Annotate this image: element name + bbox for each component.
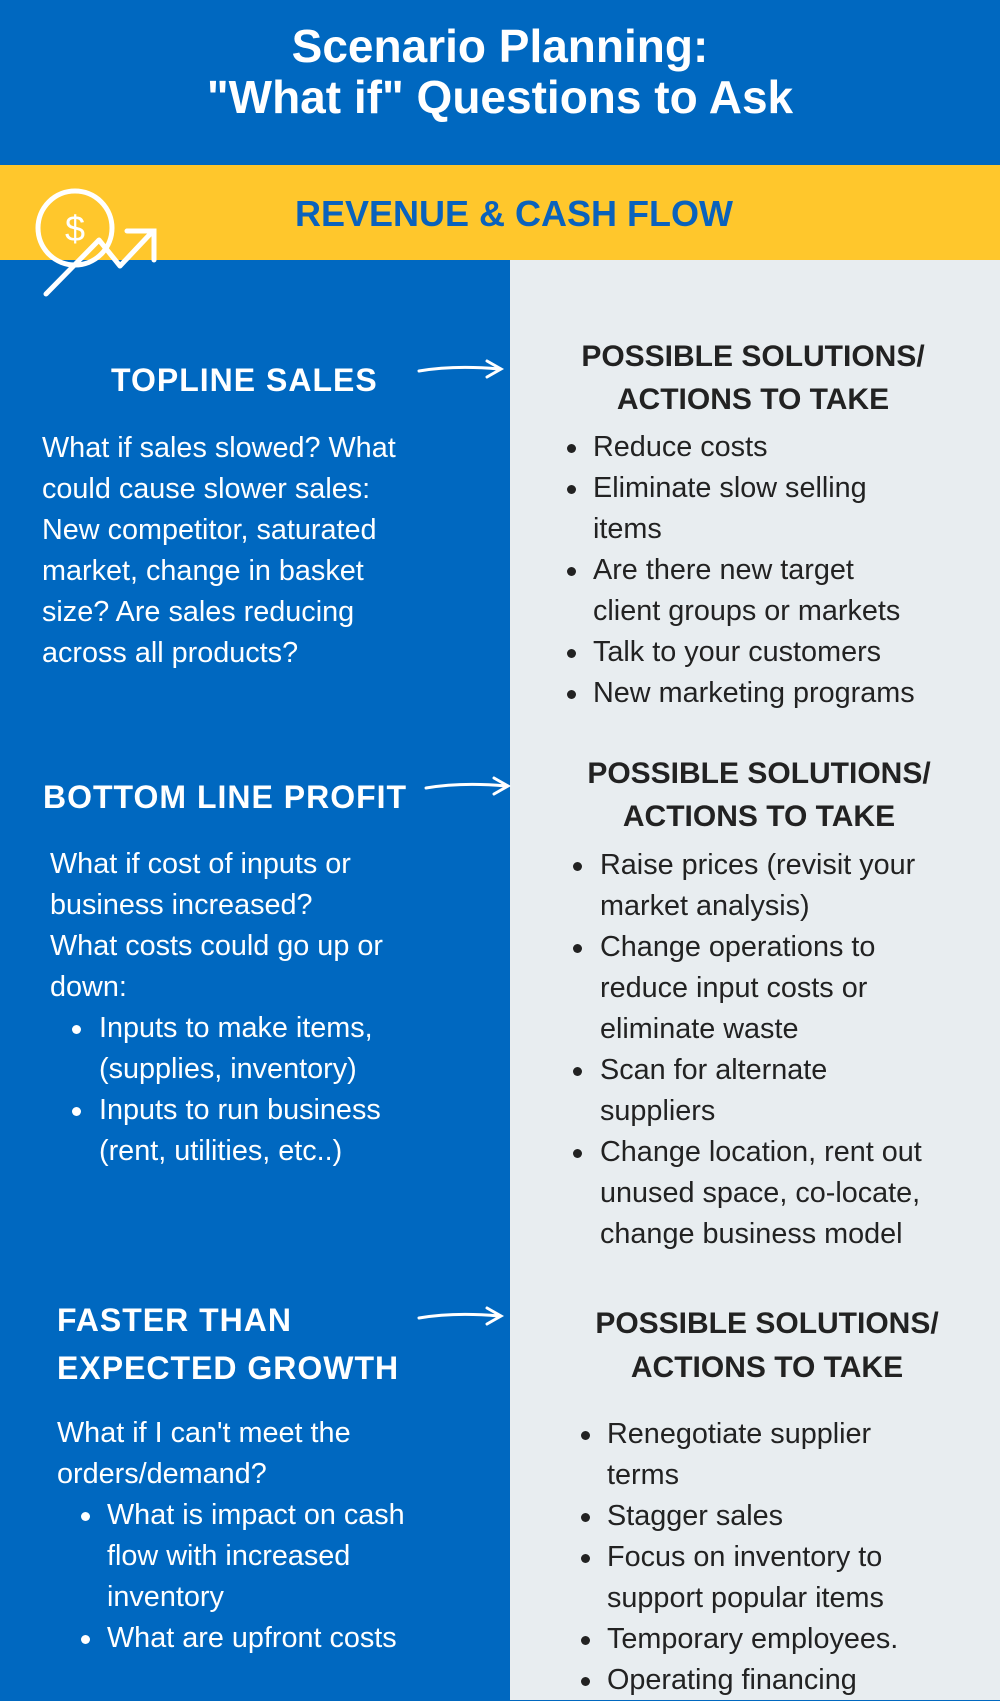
- bullet list: support popular items: [607, 1582, 884, 1614]
- body text: business increased?: [50, 889, 313, 921]
- bullet list: Are there new target: [593, 554, 854, 586]
- bullet list: unused space, co-locate,: [600, 1177, 920, 1209]
- heading: faster than expected growth: EXPECTED GROWTH: [57, 1350, 399, 1386]
- body text: [57, 1417, 351, 1490]
- section 1 left: [42, 362, 396, 669]
- section 2 right: [573, 757, 931, 1250]
- body text: across all products?: [42, 637, 298, 669]
- bullets: (supplies, inventory): [99, 1053, 357, 1085]
- section 1 right: [567, 340, 925, 709]
- body text: orders/demand?: [57, 1458, 267, 1490]
- icon: money growth: [36, 188, 156, 296]
- bullet list: [567, 431, 915, 709]
- heading: bottom line profit: BOTTOM LINE PROFIT: [43, 779, 407, 815]
- body text: [50, 848, 383, 1003]
- bullets: flow with increased: [107, 1540, 350, 1572]
- body text: size? Are sales reducing: [42, 596, 354, 628]
- arrow 1: [418, 359, 504, 379]
- bullet list: Change location, rent out: [600, 1136, 922, 1168]
- bullet list: Reduce costs: [593, 431, 767, 463]
- title: "What if" Questions to Ask: [207, 71, 793, 123]
- section 2 left: [43, 779, 407, 1167]
- bullets: Inputs to make items,: [99, 1012, 373, 1044]
- heading: POSSIBLE SOLUTIONS/: [587, 757, 931, 790]
- arrow 3: [418, 1306, 504, 1326]
- bullet list: items: [593, 513, 662, 545]
- bullet list: Renegotiate supplier: [607, 1418, 871, 1450]
- body text: New competitor, saturated: [42, 514, 377, 546]
- title: [207, 20, 794, 123]
- bullet list: Raise prices (revisit your: [600, 849, 915, 881]
- bullet list: Stagger sales: [607, 1500, 783, 1532]
- bullet list: Operating financing: [607, 1664, 857, 1696]
- body text: could cause slower sales:: [42, 473, 370, 505]
- body text: [42, 432, 396, 669]
- body text: What if cost of inputs or: [50, 848, 351, 880]
- heading: ACTIONS TO TAKE: [617, 383, 889, 416]
- bullets: [72, 1012, 381, 1167]
- bullets: What are upfront costs: [107, 1622, 397, 1654]
- heading: faster than expected growth: FASTER THAN: [57, 1302, 292, 1338]
- heading: faster than expected growth: [57, 1302, 399, 1386]
- bullet list: terms: [607, 1459, 679, 1491]
- body text: What if sales slowed? What: [42, 432, 396, 464]
- heading: [595, 1307, 939, 1384]
- section 3 left: [57, 1302, 405, 1654]
- right panel: [510, 260, 1000, 1700]
- title: Scenario Planning:: [292, 20, 708, 72]
- heading: ACTIONS TO TAKE: [631, 1351, 903, 1384]
- body text: What if I can't meet the: [57, 1417, 351, 1449]
- body text: market, change in basket: [42, 555, 364, 587]
- bullet list: Scan for alternate: [600, 1054, 827, 1086]
- bullet list: client groups or markets: [593, 595, 900, 627]
- bullet list: eliminate waste: [600, 1013, 798, 1045]
- bullet list: [573, 849, 922, 1250]
- bullets: Inputs to run business: [99, 1094, 381, 1126]
- bullet list: market analysis): [600, 890, 810, 922]
- heading: topline sales: TOPLINE SALES: [111, 362, 378, 398]
- bullets: inventory: [107, 1581, 224, 1613]
- body text: down:: [50, 971, 127, 1003]
- bullet list: reduce input costs or: [600, 972, 867, 1004]
- bullet list: Change operations to: [600, 931, 875, 963]
- bullet list: Temporary employees.: [607, 1623, 898, 1655]
- bullets: What is impact on cash: [107, 1499, 405, 1531]
- heading: [587, 757, 931, 833]
- heading: POSSIBLE SOLUTIONS/: [581, 340, 925, 373]
- yellow band: [0, 165, 1000, 260]
- bullet list: [581, 1418, 898, 1696]
- bullet list: suppliers: [600, 1095, 715, 1127]
- arrow 2: [424, 776, 510, 796]
- bullet list: Talk to your customers: [593, 636, 881, 668]
- bullet list: change business model: [600, 1218, 903, 1250]
- heading: [581, 340, 925, 416]
- section 3 right: [581, 1307, 939, 1696]
- bullet list: Eliminate slow selling: [593, 472, 867, 504]
- section title: REVENUE & CASH FLOW: [295, 193, 733, 234]
- bullet list: New marketing programs: [593, 677, 915, 709]
- heading: POSSIBLE SOLUTIONS/: [595, 1307, 939, 1340]
- heading: ACTIONS TO TAKE: [623, 800, 895, 833]
- header band: [0, 0, 1000, 165]
- bullets: (rent, utilities, etc..): [99, 1135, 342, 1167]
- bullet list: Focus on inventory to: [607, 1541, 882, 1573]
- body text: What costs could go up or: [50, 930, 383, 962]
- bullets: [81, 1499, 405, 1654]
- icon: money growth: $: [65, 208, 85, 249]
